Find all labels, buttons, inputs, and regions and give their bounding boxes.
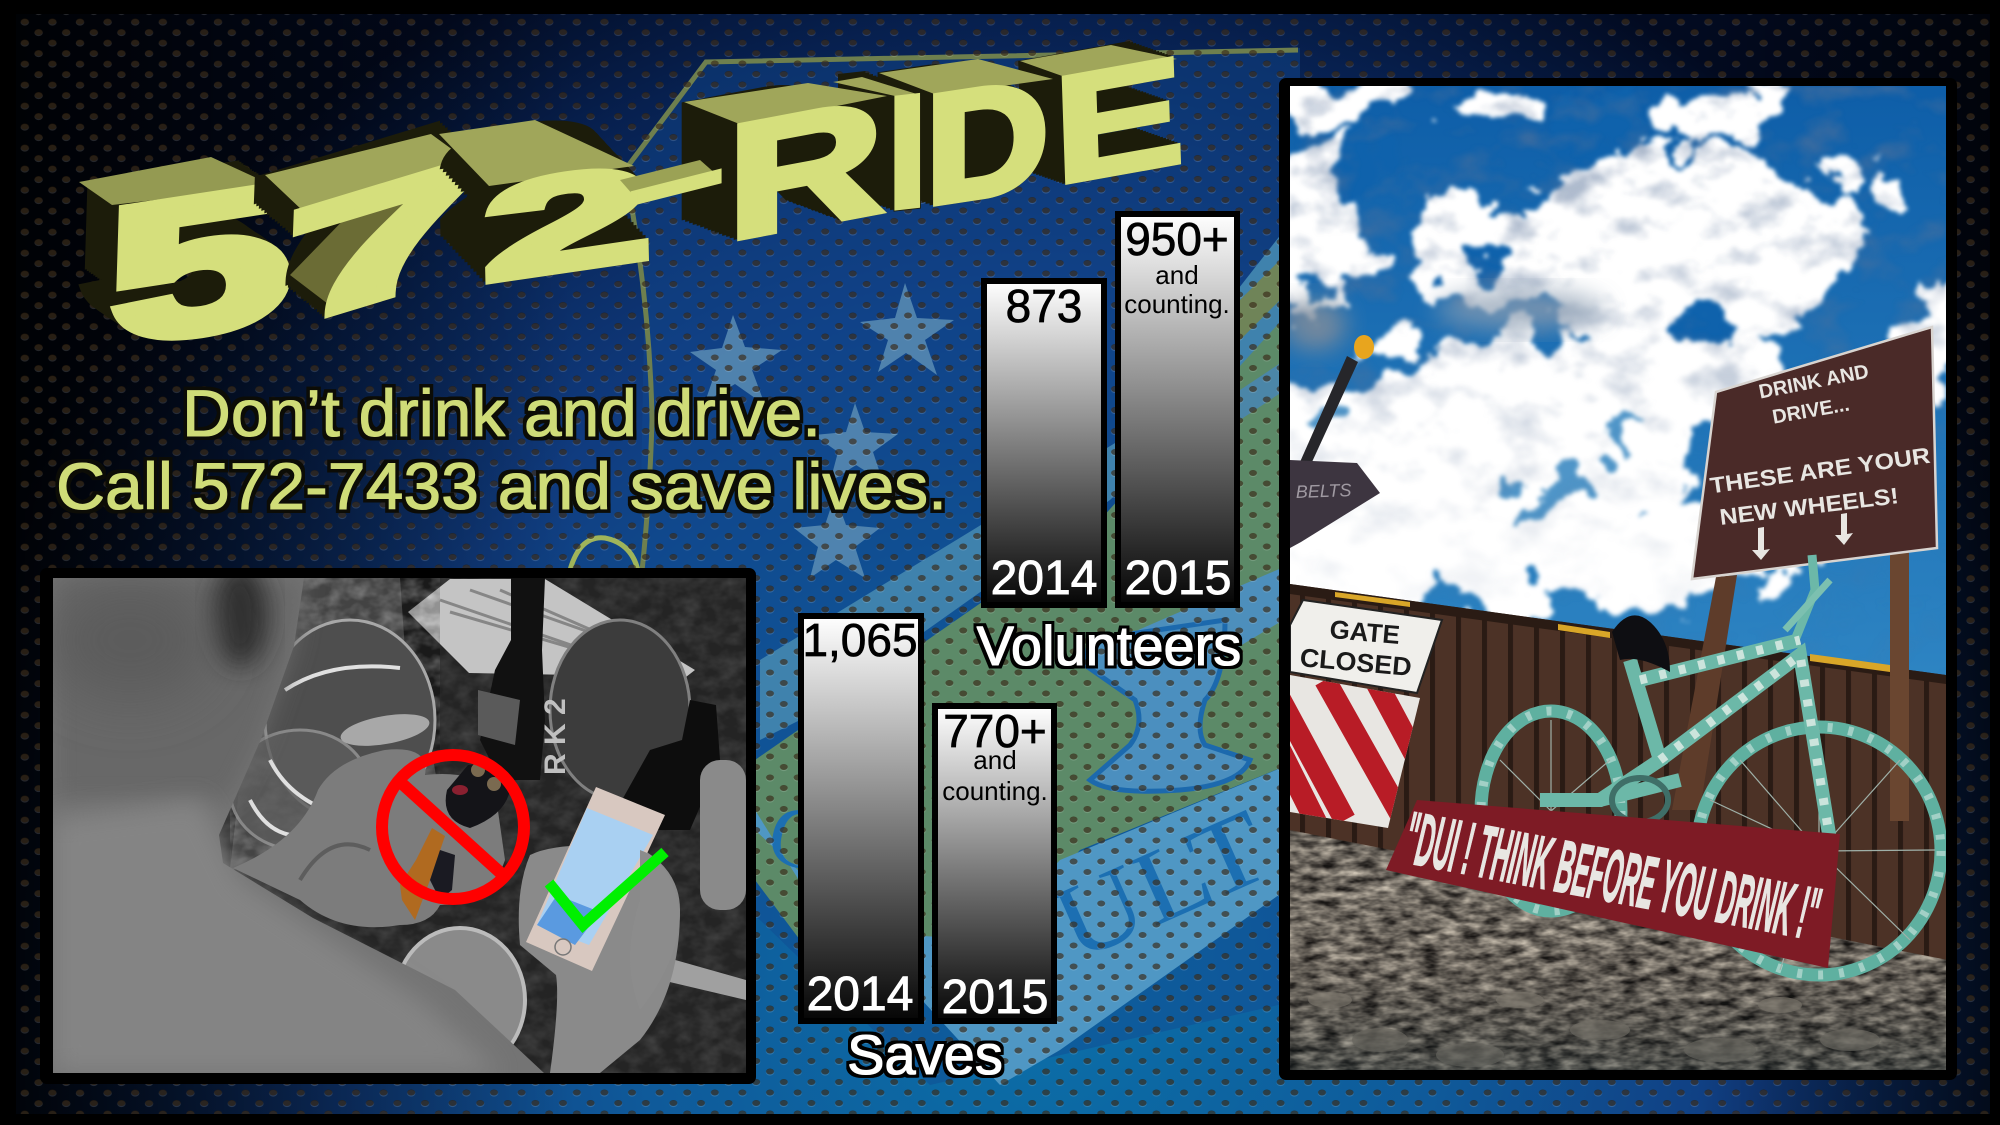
letter D: D [925,46,1049,239]
bar: volunteers 2014 [984,280,1104,605]
brown sign [1692,327,1937,579]
letter I: I [882,55,932,248]
letter E: E [1050,24,1187,217]
shield emblem: C [760,785,836,891]
bar: saves 2015 [935,705,1054,1024]
saddle [1612,615,1670,672]
letter R: R [727,65,884,275]
letter E: E [1050,24,1187,217]
bicycle [1481,555,1941,975]
shield outline [625,50,1298,590]
clouds [1290,86,1946,624]
letter R: R [727,65,884,275]
sky [1290,86,1946,706]
red DUI sign [1386,795,1840,968]
letter 7: 7 [284,122,485,360]
bar: volunteers 2014: 2014 [991,552,1097,605]
brown sign: DRINK AND [1757,361,1871,404]
trophy claw [1085,620,1250,791]
bar: volunteers 2015 [1118,213,1237,605]
letter 7: 7 [284,122,485,360]
bar: volunteers 2015: counting. [1124,289,1230,319]
label: volunteers: Volunteers [977,614,1241,677]
hand holding keys [233,749,505,927]
stars [690,283,954,578]
title: 572-RIDE 3D lettering [79,24,1187,385]
bar: saves 2015: and [973,745,1017,775]
bottles: R K 2 [539,698,572,775]
letter 2: 2 [481,135,653,309]
letter I: I [882,55,932,248]
chart: volunteers [977,213,1241,677]
gate closed sign: GATE [1328,614,1401,650]
no keys symbol [382,755,524,899]
letter D: D [925,46,1049,239]
bottles [478,578,746,910]
gravel ground [1290,830,1946,1070]
bar: saves 2015: 770+ [943,705,1047,757]
subtitle text [56,376,947,523]
chart: saves [801,614,1054,1086]
belts sign and light pole: BELTS [1295,480,1352,502]
phone [526,787,665,971]
bar: saves 2015: 2015 [942,971,1048,1024]
bar: saves 2015: counting. [942,776,1048,806]
person head and shirt [53,578,544,1073]
bar: volunteers 2015: and [1155,260,1199,290]
photo panel: bike sign [1230,65,1966,1080]
photo panel: keys vs phone [40,563,756,1084]
sign posts [1672,551,1909,821]
green check mark [549,852,665,925]
shield emblem [570,48,1300,1085]
bar: volunteers 2014: 873 [1006,280,1082,332]
bar: volunteers 2015: 950+ [1125,213,1229,265]
gate closed sign: CLOSED [1299,642,1413,682]
letter 5: 5 [101,144,296,385]
label: saves: Saves [847,1023,1003,1086]
key fob and keys [400,763,510,920]
striped barrier [1290,675,1420,828]
subtitle text: Call 572-7433 and save lives. [56,449,947,523]
subtitle text: Don’t drink and drive. [182,376,821,450]
bar: saves 2014: 2014 [807,968,913,1021]
letter 5: 5 [101,144,296,385]
letter 2: 2 [481,135,653,309]
gate closed sign [1290,600,1442,693]
fence [1290,584,1946,960]
hyphen: - [621,104,732,252]
brown sign: THESE ARE YOUR [1708,443,1932,498]
brown sign: DRIVE... [1771,394,1851,429]
ULT lettering: ULT [1037,787,1285,983]
newspaper [408,579,695,677]
letter I [833,55,932,248]
bar: saves 2014 [801,614,921,1021]
belts sign and light pole [1290,335,1380,548]
table background [219,578,746,1073]
hand holding phone [519,845,680,1073]
glasses [230,578,746,1072]
bar: saves 2014: 1,065 [802,614,918,666]
brown sign: NEW WHEELS! [1718,483,1900,530]
bar: volunteers 2015: 2015 [1125,552,1231,605]
